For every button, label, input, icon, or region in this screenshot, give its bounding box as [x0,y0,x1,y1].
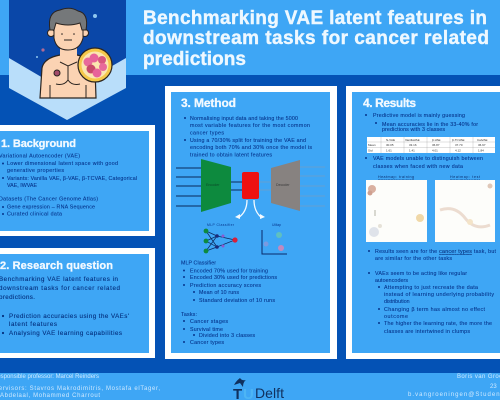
header band [0,0,500,75]
heatmap: test [435,175,495,242]
table: accuracy: N-VAE [386,138,395,142]
table: accuracy: Mean [368,143,376,147]
text: models unable [365,156,483,170]
text: research question body: Analysing VAE learning capabilities [9,330,122,337]
text: classifier and tasks: Divided into 3 classes [199,333,255,339]
table: accuracy: 1.61 [386,148,392,152]
text: method steps [184,116,312,158]
text: models unable: VAE models unable to distinguish between [373,156,483,162]
table: accuracy: 36.87 [432,143,440,147]
text: research question body: Prediction accuracies using the VAEs' [9,313,129,320]
text: research question body: Benchmarking VAE latent features in [0,276,119,283]
table: accuracy: CatVAE [477,138,487,142]
table: accuracy: 37.70 [455,143,463,147]
text: classifier and tasks: Cancer types [190,340,224,346]
text: background body: Datasets (The Cancer Genome Atlas) [0,196,98,202]
text: classifier and tasks: Encoded 30% used for predictions [190,275,277,281]
text: background body: VAE, IWVAE [7,183,37,189]
text: results conclusions: are similar for the other tasks [375,256,452,262]
text: results intro: Mean accuracies lie in the 33-40% for [382,122,478,128]
table: accuracy: 1.84 [478,148,484,152]
diagram: VAE architecture [176,159,325,219]
text: research question body: predictions. [0,294,35,301]
title: Benchmarking VAE latent features in [143,8,487,29]
table: accuracy [367,137,495,153]
text: classifier and tasks: Cancer stages [190,319,228,325]
text: results intro: Predictive model is mainly guessing [373,113,465,119]
logo: TU Delft [233,378,284,400]
text: method steps: trained to obtain latent features [190,152,272,158]
panel: results [346,86,500,359]
panel: background [0,125,155,236]
title [143,8,489,70]
diagram: MLP classifier: MLP Classifier [207,223,235,227]
text: results conclusions: distribution [384,299,410,305]
table: accuracy: Std [368,148,373,152]
table: accuracy: 4.01 [432,148,438,152]
icon banner: patient with skin cancer [9,0,126,120]
text: results conclusions: classes are intertwined in clumps [384,329,470,335]
text: background body: Lower dimensional latent space with good [7,161,118,167]
panel: research question [0,248,155,358]
text: results intro: predictions with 3 classes [382,127,445,133]
text: method steps: encoding both 70% and 30% once the model is [190,145,312,151]
text: research question body: latent features [9,321,57,328]
text: results conclusions: Changing β term has almost no effect [384,307,486,313]
text: results conclusions: outcome [384,314,408,320]
text: background body: Gene expression – RNA Sequence [7,204,95,210]
table: accuracy: 33.16 [409,143,417,147]
text: background body: Variational Autoencoder (VAE) [0,154,80,160]
table: accuracy: 4.12 [455,148,461,152]
heading: background: 1. Background [1,138,76,150]
footer: author: 23 [490,384,497,390]
text: results conclusions: Results seen are for the cancer types task, but [375,249,497,255]
text: research question body [0,276,129,337]
text: research question body: downstream tasks for cancer related [0,285,121,292]
text: classifier and tasks: Prediction accuracy scores [190,283,261,289]
footer band [0,373,500,400]
table: accuracy: β-VAE [432,138,441,142]
text: classifier and tasks: Tasks: [181,312,197,318]
text: classifier and tasks: Standard deviation of 10 runs [199,298,275,304]
text: method steps: most variable features for the most common [190,123,310,129]
footer: supervisors: Abdelaal, Mohammed Charrout [0,393,100,399]
text: method steps: Normalising input data and taking the 5000 [190,116,298,122]
text: results conclusions: VAEs seem to be acting like regular [375,271,467,277]
diagram: VAE architecture: Encoder [206,183,220,187]
diagram: MLP classifier [204,223,238,253]
text: method steps: cancer types [190,130,224,136]
text: background body [0,154,137,218]
title: predictions [143,49,246,70]
text: results conclusions: autoencoders [375,278,408,284]
table: accuracy: 1.41 [409,148,415,152]
heading: results: 4. Results [363,96,416,110]
table: accuracy: VanillaVAE [405,138,420,142]
title: downstream tasks for cancer related [143,28,489,49]
text: background body: Curated clinical data [7,212,62,218]
text: method steps: Using a 70/30% split for training the VAE and [190,138,306,144]
table: accuracy: 30.05 [386,143,394,147]
heatmap: test: Heatmap: test [450,175,480,179]
text: results conclusions: Attempting to just recreate the data [384,285,478,291]
heading: research question: 2. Research question [0,260,113,272]
table: accuracy: 36.97 [478,143,486,147]
text: background body: generative properties [7,168,64,174]
panel: method [165,86,337,359]
heatmap: training: Heatmap: training [378,175,414,179]
text: results conclusions [368,249,497,335]
text: classifier and tasks: Encoded 70% used for training [190,268,268,274]
chart: UMap latent clusters [262,223,287,254]
text: models unable: classes when faced with new data [373,164,463,170]
text: classifier and tasks: MLP Classifier [181,260,216,266]
footer: supervisors [0,374,160,399]
heatmap: training [366,175,427,242]
table: accuracy: β-TCVAE [452,138,465,142]
text: background body: Variants: Vanilla VAE, β-VAE, β-TCVAE, Categorical [7,176,137,182]
text: classifier and tasks: Survival time [190,327,223,333]
text: classifier and tasks [181,260,277,346]
text: results conclusions: The higher the learning rate, the more the [384,321,492,327]
text: results conclusions: instead of learning underlying probability [384,292,494,298]
chart: UMap latent clusters: UMap [272,223,281,227]
text: classifier and tasks: Mean of 10 runs [199,290,239,296]
diagram: VAE architecture: Decoder [276,183,290,187]
footer: author [408,374,500,398]
text: results intro [365,113,478,133]
heading: method: 3. Method [181,96,236,110]
